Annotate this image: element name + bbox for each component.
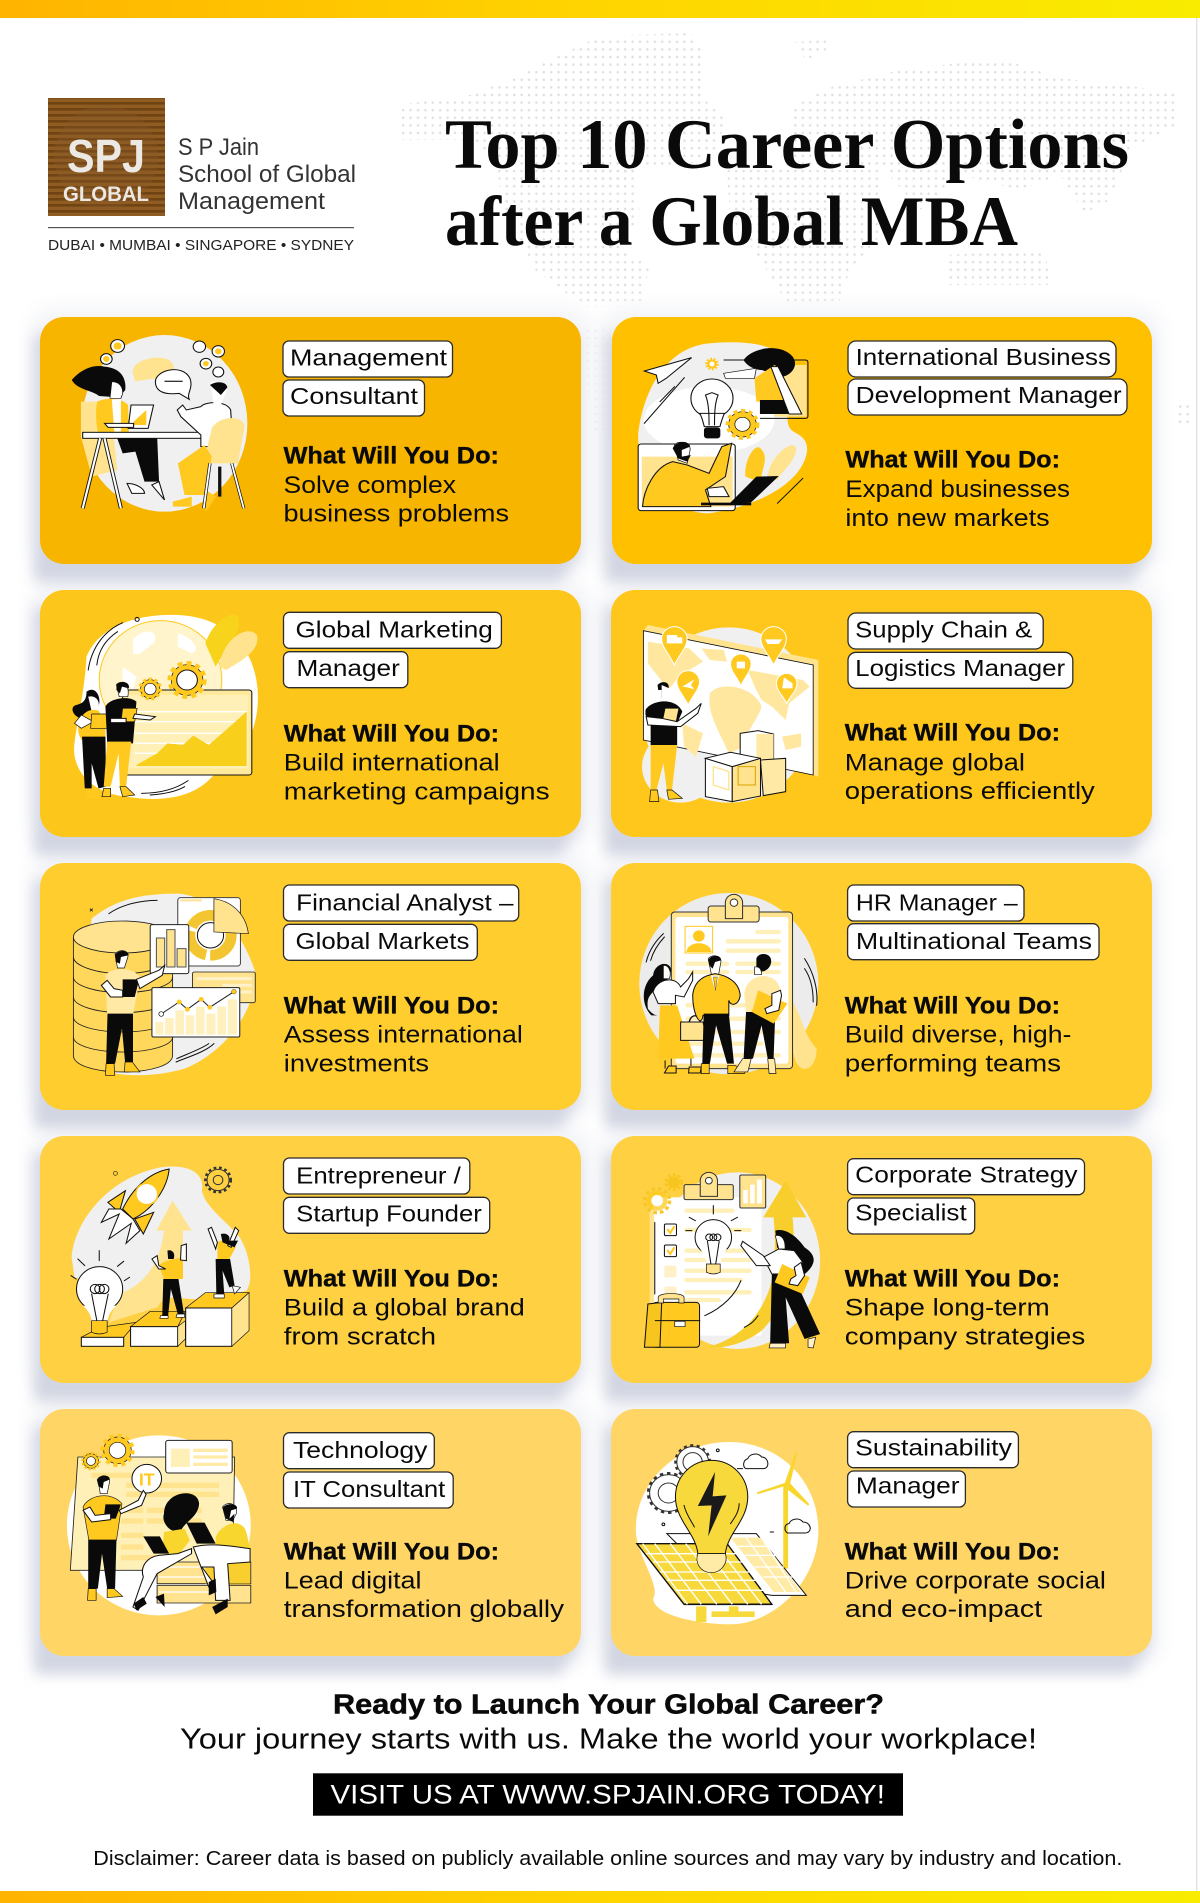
panel: Supply Chain & Logistics Manager	[611, 590, 1152, 837]
job title	[848, 613, 1073, 688]
title: after a Global MBA	[445, 183, 1018, 261]
illustration: strategy arrow and woman	[644, 1172, 820, 1349]
description: What Will You Do:	[284, 993, 499, 1020]
job title: HR Manager –	[856, 890, 1018, 916]
panel: Technology IT Consultant	[40, 1409, 581, 1656]
description	[284, 443, 509, 528]
card shadows	[30, 306, 1162, 1674]
description: What Will You Do:	[845, 720, 1060, 747]
job title: Global Markets	[296, 928, 469, 954]
visit button	[313, 1773, 903, 1816]
description: What Will You Do:	[845, 1266, 1060, 1293]
description: Build international	[284, 750, 500, 777]
description: What Will You Do:	[845, 1539, 1060, 1566]
panel: International Business Development Manager	[612, 317, 1152, 564]
job title	[284, 612, 501, 688]
illustration: coin stack and charts	[73, 894, 255, 1075]
description: Manage global	[845, 749, 1025, 776]
job title: Multinational Teams	[856, 928, 1092, 954]
description: What Will You Do:	[845, 447, 1060, 474]
logo wordmark: S P Jain	[178, 134, 259, 161]
description: Expand businesses	[845, 476, 1070, 503]
job title	[848, 885, 1099, 960]
job title	[284, 1158, 490, 1233]
logo locations: DUBAI • MUMBAI • SINGAPORE • SYDNEY	[48, 237, 354, 254]
description: What Will You Do:	[284, 1266, 499, 1293]
panel: Financial Analyst Global Markets	[40, 863, 581, 1110]
description: Drive corporate social	[845, 1568, 1106, 1595]
description: into new markets	[845, 505, 1050, 532]
job title: International Business	[856, 344, 1111, 370]
job title: Manager	[856, 1473, 960, 1499]
logo	[48, 98, 356, 254]
description: Lead digital	[284, 1568, 422, 1595]
description: Solve complex	[284, 472, 456, 499]
illustration: globe, gears and marketing chart	[72, 615, 258, 799]
description: What Will You Do:	[284, 443, 499, 470]
job title: Startup Founder	[296, 1200, 482, 1226]
job title: Sustainability	[855, 1435, 1012, 1461]
illustration: IT team with laptops	[67, 1435, 251, 1615]
panel: Management Consultant	[40, 317, 581, 564]
description: from scratch	[284, 1324, 436, 1351]
description: What Will You Do:	[845, 993, 1060, 1020]
description	[284, 993, 523, 1077]
logo wordmark: School of Global	[178, 161, 356, 188]
job title: Supply Chain &	[855, 617, 1032, 643]
job title: Corporate Strategy	[855, 1162, 1078, 1188]
title: Top 10 Career Options	[445, 106, 1129, 184]
visit button: VISIT US AT WWW.SPJAIN.ORG TODAY!	[330, 1779, 885, 1809]
logo mark: SPJ	[67, 130, 145, 182]
logo mark: GLOBAL	[63, 183, 149, 206]
logo mark	[48, 98, 165, 216]
panel: Corporate Strategy Specialist	[611, 1136, 1152, 1383]
description: business problems	[284, 501, 509, 528]
panel: Entrepreneur Startup Founder	[40, 1136, 581, 1383]
description	[284, 1266, 525, 1351]
dotted world map	[398, 33, 1192, 440]
job title: Development Manager	[856, 382, 1122, 408]
illustration: two people at a table	[72, 335, 247, 512]
job title: Specialist	[855, 1200, 967, 1226]
logo wordmark: Management	[178, 188, 325, 215]
description: performing teams	[845, 1050, 1061, 1077]
panel: Global Marketing Manager	[40, 590, 581, 837]
illustration: light bulb and solar panels	[636, 1442, 818, 1624]
job title: Entrepreneur /	[296, 1162, 461, 1188]
description	[845, 1539, 1106, 1623]
description: and eco-impact	[845, 1596, 1043, 1623]
description: Build a global brand	[284, 1295, 525, 1322]
description: What Will You Do:	[284, 721, 499, 748]
job title	[848, 341, 1127, 415]
panel: HR Manager Multinational Teams	[611, 863, 1152, 1110]
top gradient bar	[0, 0, 1200, 18]
description: What Will You Do:	[284, 1539, 499, 1566]
disclaimer: Disclaimer: Career data is based on publicly available online sources and may vary by industry and location.	[93, 1848, 1122, 1870]
description: company strategies	[845, 1323, 1085, 1350]
job title: Financial Analyst –	[296, 890, 514, 916]
job title: Management	[290, 345, 448, 371]
job title: Technology	[293, 1437, 428, 1463]
description: marketing campaigns	[284, 778, 550, 805]
description	[845, 447, 1070, 532]
description: Build diverse, high-	[845, 1022, 1071, 1049]
description: operations efficiently	[845, 778, 1095, 805]
job title: Global Marketing	[296, 616, 493, 642]
illustration: rocket, bulb and steps	[71, 1167, 250, 1346]
job title	[848, 1432, 1018, 1507]
description	[845, 720, 1095, 805]
illustration: IT team with laptops: IT	[139, 1470, 155, 1490]
description: Shape long-term	[845, 1295, 1050, 1322]
description: investments	[284, 1050, 429, 1077]
job title	[848, 1159, 1084, 1234]
job title	[283, 341, 452, 416]
call to action heading: Ready to Launch Your Global Career?	[333, 1688, 884, 1719]
illustration: idea bulb and two people in windows	[638, 342, 808, 513]
description	[845, 993, 1071, 1077]
description	[284, 721, 550, 805]
job title: IT Consultant	[293, 1476, 446, 1502]
call to action subheading: Your journey starts with us. Make the world your workplace!	[180, 1723, 1037, 1755]
description: Assess international	[284, 1022, 523, 1049]
job title: Logistics Manager	[855, 655, 1066, 681]
logo wordmark	[178, 134, 356, 215]
right edge line	[1196, 18, 1197, 1891]
description	[284, 1539, 564, 1623]
job title	[284, 1433, 453, 1508]
job title: Consultant	[290, 383, 419, 409]
title	[445, 106, 1129, 261]
description	[845, 1266, 1085, 1350]
panel: Sustainability Manager	[611, 1409, 1152, 1656]
job title	[284, 885, 519, 960]
bottom gradient bar	[0, 1891, 1200, 1903]
illustration: three people and clipboard	[639, 893, 818, 1074]
job title: Manager	[296, 655, 400, 681]
illustration: map with pins and boxes	[642, 625, 818, 803]
description: transformation globally	[284, 1596, 564, 1623]
